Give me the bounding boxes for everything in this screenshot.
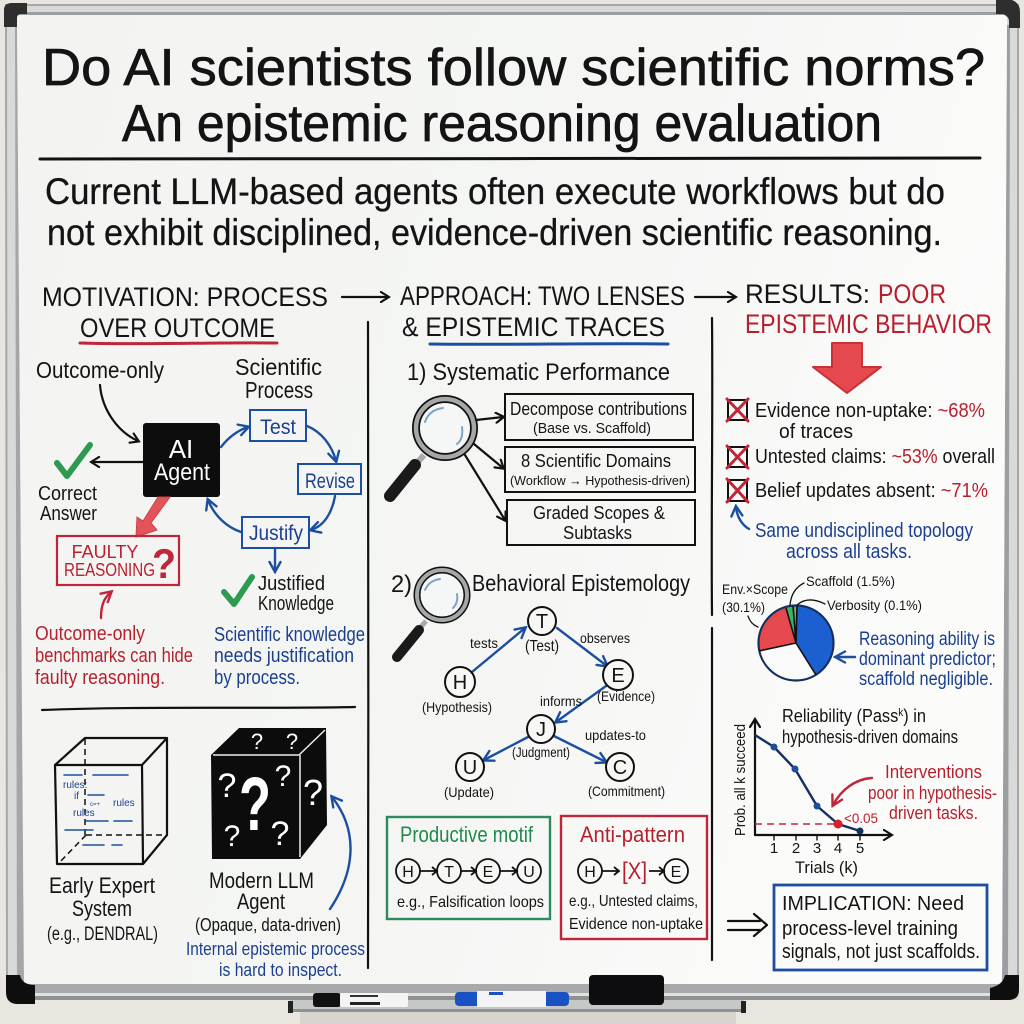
AI agent box: AI bbox=[169, 434, 193, 464]
icon: black box cube bbox=[211, 728, 327, 859]
epistemic graph: (Test) bbox=[525, 638, 559, 655]
label: modern LLM agent bbox=[195, 868, 341, 935]
epistemic graph: (Evidence) bbox=[597, 688, 655, 704]
heading: systematic performance: 1) Systematic Performance bbox=[407, 359, 670, 386]
pie labels: Env.×Scope bbox=[722, 581, 788, 597]
arrow: note to faulty box bbox=[101, 592, 111, 618]
epistemic graph: (Commitment) bbox=[588, 783, 665, 799]
note: scientific knowledge: needs justification bbox=[214, 645, 354, 667]
box: justify bbox=[242, 517, 309, 548]
implication box: signals, not just scaffolds. bbox=[782, 941, 980, 963]
box: revise: Revise bbox=[305, 470, 355, 493]
note: internal process: is hard to inspect. bbox=[219, 960, 342, 980]
box: anti-pattern: Evidence non-uptake bbox=[569, 916, 703, 933]
reliability chart: 4 bbox=[834, 840, 842, 857]
pie labels bbox=[722, 573, 922, 627]
AI agent box bbox=[143, 423, 220, 497]
marker tray with markers and eraser bbox=[288, 975, 746, 1024]
reliability chart: Trials (k) bbox=[795, 858, 858, 877]
result: belief updates: Belief updates absent: ~71% bbox=[755, 480, 988, 502]
epistemic graph: (Update) bbox=[444, 784, 494, 800]
panel: systematic performance bbox=[390, 359, 695, 545]
outcome-only label: Outcome-only bbox=[36, 357, 164, 383]
subtitle: Current LLM-based agents often execute workflows but do bbox=[45, 171, 945, 212]
heading: motivation bbox=[42, 282, 328, 344]
arrows to boxes bbox=[465, 417, 505, 520]
subtitle: not exhibit disciplined, evidence-driven scientific reasoning. bbox=[47, 212, 942, 253]
reliability chart: 2 bbox=[792, 840, 800, 857]
epistemic graph: updates-to bbox=[585, 727, 646, 743]
title: An epistemic reasoning evaluation bbox=[122, 95, 882, 153]
reliability chart: Prob. all k succeed bbox=[732, 724, 749, 836]
label: early expert system bbox=[47, 873, 158, 945]
justified knowledge label: Knowledge bbox=[258, 593, 334, 615]
note: internal process bbox=[186, 939, 365, 980]
box: anti-pattern: [X] bbox=[622, 858, 647, 885]
note: reasoning ability: Reasoning ability is bbox=[859, 629, 995, 650]
note: outcome-only benchmarks: Outcome-only bbox=[35, 623, 145, 645]
heading: approach bbox=[400, 281, 685, 344]
faulty reasoning box: FAULTY bbox=[72, 542, 138, 562]
heading: motivation: MOTIVATION: PROCESS bbox=[42, 282, 328, 312]
faulty reasoning box: ? bbox=[152, 540, 176, 587]
title rule bbox=[40, 158, 980, 159]
box: productive motif: U bbox=[523, 864, 535, 881]
box: anti-pattern: Anti-pattern bbox=[580, 822, 685, 847]
AI agent box: Agent bbox=[154, 459, 210, 486]
heading: approach: & EPISTEMIC TRACES bbox=[402, 312, 665, 342]
label: early expert system: Early Expert bbox=[49, 873, 155, 898]
note: reasoning ability: dominant predictor; bbox=[859, 649, 996, 670]
faulty reasoning box bbox=[57, 536, 179, 587]
heading: behavioral epistemology: 2) bbox=[391, 571, 412, 598]
note: outcome-only benchmarks bbox=[35, 623, 193, 689]
box: productive motif: Productive motif bbox=[400, 822, 534, 847]
panel: results bbox=[722, 343, 997, 970]
box: anti-pattern bbox=[561, 816, 707, 939]
epistemic graph: informs bbox=[540, 693, 582, 709]
label: early expert system: System bbox=[72, 896, 132, 921]
icon: black box cube: ? bbox=[303, 772, 323, 813]
heading: results: RESULTS: bbox=[745, 279, 870, 309]
epistemic graph: E bbox=[611, 665, 625, 687]
result: evidence non-uptake bbox=[727, 399, 985, 443]
epistemic graph: (Judgment) bbox=[512, 744, 570, 760]
implication box: IMPLICATION: Need bbox=[782, 893, 964, 915]
chart title bbox=[782, 706, 958, 747]
box: revise bbox=[298, 464, 361, 494]
scientific process label bbox=[235, 354, 322, 403]
reliability chart bbox=[732, 706, 958, 877]
epistemic graph: U bbox=[463, 757, 477, 779]
note: interventions: driven tasks. bbox=[889, 803, 978, 823]
title: Do AI scientists follow scientific norms? bbox=[42, 39, 985, 97]
correct answer label: Correct bbox=[38, 483, 97, 505]
epistemic graph: (Hypothesis) bbox=[422, 699, 492, 715]
note: interventions bbox=[868, 762, 997, 823]
arrow: outcome to agent bbox=[100, 385, 138, 441]
box: test: Test bbox=[260, 416, 296, 439]
box: decompose contributions bbox=[505, 394, 693, 440]
box: graded scopes: Graded Scopes & bbox=[533, 503, 665, 523]
reliability chart: 3 bbox=[813, 840, 821, 857]
box: decompose contributions: (Base vs. Scaffold) bbox=[533, 420, 651, 437]
icon: transparent cube bbox=[55, 738, 167, 864]
box: graded scopes bbox=[507, 500, 695, 545]
title bbox=[42, 39, 985, 153]
box: anti-pattern: E bbox=[671, 864, 681, 881]
box: graded scopes: Subtasks bbox=[563, 523, 632, 543]
justified knowledge label bbox=[258, 573, 334, 615]
epistemic graph: H bbox=[453, 672, 467, 694]
label: modern LLM agent: Modern LLM bbox=[209, 868, 314, 893]
result: evidence non-uptake: Evidence non-uptake: ~68% bbox=[755, 400, 985, 422]
icon: transparent cube: rules: bbox=[63, 780, 87, 791]
label: early expert system: (e.g., DENDRAL) bbox=[47, 924, 158, 945]
heading: behavioral epistemology: Behavioral Epistemology bbox=[472, 570, 690, 596]
box: productive motif: E bbox=[483, 864, 493, 881]
blue marker bbox=[455, 991, 569, 1007]
box: scientific domains: (Workflow → Hypothesis-driven) bbox=[510, 473, 690, 488]
result: untested claims: Untested claims: ~53% overall bbox=[755, 446, 995, 468]
pie labels: (30.1%) bbox=[722, 599, 765, 615]
box: productive motif: e.g., Falsification loops bbox=[397, 894, 544, 911]
note: reasoning ability: scaffold negligible. bbox=[859, 669, 993, 690]
note: internal process: Internal epistemic process bbox=[186, 939, 365, 959]
black marker bbox=[313, 993, 408, 1007]
panel: expert system vs LLM bbox=[47, 728, 365, 980]
box: justify: Justify bbox=[249, 522, 303, 545]
panel: behavioral epistemology bbox=[387, 570, 707, 939]
box: test bbox=[250, 410, 306, 441]
arrow: approach to results bbox=[695, 296, 735, 298]
icon: black box cube: ? bbox=[218, 767, 236, 805]
implication box bbox=[774, 885, 987, 970]
heading: motivation: OVER OUTCOME bbox=[80, 313, 275, 343]
note: scientific knowledge bbox=[214, 624, 365, 689]
scientific process label: Process bbox=[245, 377, 313, 403]
faulty reasoning box: REASONING bbox=[64, 560, 155, 580]
epistemic graph: observes bbox=[580, 630, 630, 646]
heading: results: POOR bbox=[878, 279, 946, 309]
note: scientific knowledge: Scientific knowledge bbox=[214, 624, 365, 646]
chart title: hypothesis-driven domains bbox=[782, 727, 958, 747]
column dividers bbox=[367, 318, 712, 968]
icon: transparent cube: rules bbox=[73, 808, 95, 819]
epistemic graph: J bbox=[536, 719, 546, 741]
note: scientific knowledge: by process. bbox=[214, 667, 300, 689]
justified knowledge label: Justified bbox=[258, 573, 325, 595]
subtitle bbox=[45, 171, 945, 253]
box: decompose contributions: Decompose contributions bbox=[510, 399, 687, 419]
icon: black box cube: ? bbox=[251, 729, 263, 754]
icon: black box cube: ? bbox=[286, 729, 298, 754]
reliability chart: 1 bbox=[770, 840, 778, 857]
icon: transparent cube: if bbox=[74, 791, 79, 802]
icon: transparent cube: rules bbox=[113, 798, 135, 809]
reliability chart: 5 bbox=[856, 840, 864, 857]
epistemic graph: T bbox=[536, 611, 548, 633]
reliability chart: <0.05 bbox=[844, 810, 878, 826]
icon: small magnifier bbox=[397, 570, 467, 657]
arrow: interventions to chart bbox=[833, 778, 872, 805]
note: outcome-only benchmarks: benchmarks can hide bbox=[35, 645, 193, 667]
note: reasoning ability bbox=[859, 629, 996, 690]
box: anti-pattern: H bbox=[584, 864, 596, 881]
pie chart bbox=[758, 606, 834, 680]
epistemic graph bbox=[422, 607, 665, 800]
panel: motivation diagram bbox=[35, 354, 365, 689]
implication box: process-level training bbox=[782, 918, 958, 940]
arrow: agent to answer bbox=[92, 461, 143, 463]
red arrow to faulty reasoning bbox=[136, 497, 170, 537]
check: justified knowledge bbox=[224, 577, 252, 604]
eraser bbox=[589, 975, 664, 1005]
epistemic graph: C bbox=[613, 757, 627, 779]
scientific process label: Scientific bbox=[235, 354, 322, 380]
arrow: note to pie bbox=[836, 656, 855, 658]
frame corners bbox=[6, 975, 35, 1004]
icon: large magnifier bbox=[390, 399, 474, 496]
box: scientific domains bbox=[505, 447, 695, 492]
chart title: Reliability (Passk) in bbox=[782, 706, 926, 726]
box: productive motif: H bbox=[402, 864, 414, 881]
label: modern LLM agent: Agent bbox=[237, 889, 285, 914]
section rule bbox=[42, 707, 355, 710]
check: correct answer bbox=[57, 445, 90, 476]
heading: approach: APPROACH: TWO LENSES bbox=[400, 281, 685, 311]
icon: black box cube: ? bbox=[224, 820, 240, 853]
epistemic graph: tests bbox=[470, 635, 498, 651]
icon: black box cube: ? bbox=[239, 762, 271, 847]
arrow: motivation to approach bbox=[342, 296, 388, 298]
correct answer label bbox=[38, 483, 97, 525]
heading: behavioral epistemology bbox=[391, 570, 690, 598]
pie labels: Scaffold (1.5%) bbox=[806, 573, 895, 589]
arrow: note to cube bbox=[330, 797, 351, 909]
box: scientific domains: 8 Scientific Domains bbox=[521, 451, 671, 471]
heading: results bbox=[745, 279, 992, 339]
pie labels: Verbosity (0.1%) bbox=[827, 597, 922, 613]
box: productive motif: T bbox=[444, 864, 454, 881]
icon: transparent cube: c=+ bbox=[90, 802, 101, 808]
note: same topology bbox=[755, 520, 973, 563]
icon: black box cube: ? bbox=[271, 815, 289, 853]
note: same topology: across all tasks. bbox=[786, 541, 912, 563]
result: evidence non-uptake: of traces bbox=[779, 421, 853, 443]
note: same topology: Same undisciplined topology bbox=[755, 520, 973, 542]
box: productive motif bbox=[387, 817, 550, 919]
process cycle arrows bbox=[208, 426, 336, 571]
icon: black box cube: ? bbox=[275, 760, 291, 793]
arrow: double to implication bbox=[728, 914, 767, 936]
arrow: note to results bbox=[736, 507, 749, 529]
box: anti-pattern: e.g., Untested claims, bbox=[569, 893, 698, 910]
correct answer label: Answer bbox=[40, 503, 97, 525]
note: outcome-only benchmarks: faulty reasoning. bbox=[35, 667, 165, 689]
icon: red down arrow bbox=[813, 343, 881, 393]
label: modern LLM agent: (Opaque, data-driven) bbox=[195, 915, 341, 935]
note: interventions: Interventions bbox=[885, 762, 982, 782]
note: interventions: poor in hypothesis- bbox=[868, 783, 997, 803]
